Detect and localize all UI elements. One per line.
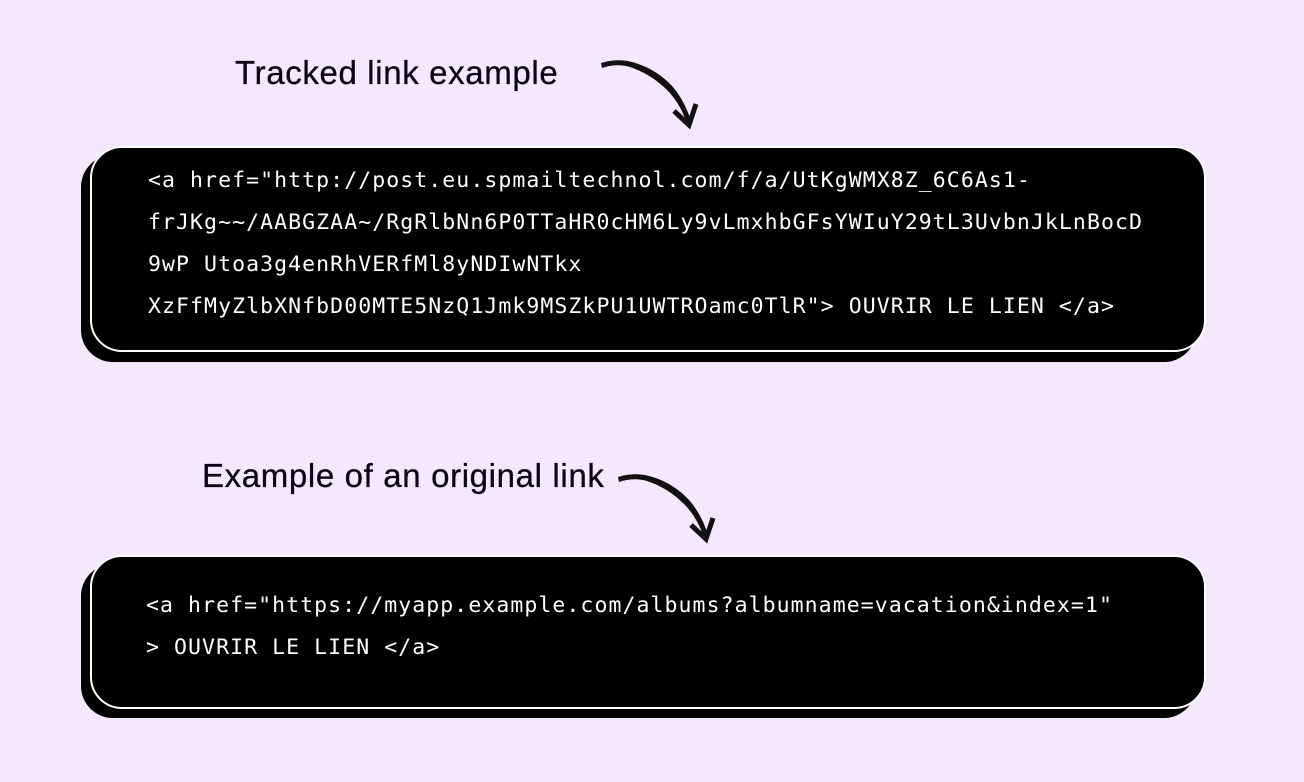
panel: original link code <box>81 555 1206 718</box>
heading: tracked link example: Tracked link example <box>235 54 558 91</box>
code: original link markup: <a href="https://myapp.example.com/albums?albumname=vacation&index=1" > OUVRIR LE LIEN </a> <box>146 593 1113 660</box>
panel: tracked link code <box>81 146 1206 362</box>
code: tracked link markup: <a href="http://post.eu.spmailtechnol.com/f/a/UtKgWMX8Z_6C6As1- frJKg~~/AABGZAA~/RgRlbNn6P0TTaHR0cHM6Ly9vLmxhbGFsYWIuY29tL3UvbnJkLnBocD 9wP Utoa3g4enRhVERfMl8yNDIwNTkx XzFfMyZlbXNfbD00MTE5NzQ1Jmk9MSZkPU1UWTROamc0TlR"> OUVRIR LE LIEN </a> <box>148 168 1143 319</box>
heading: example of an original link: Example of an original link <box>202 457 604 494</box>
